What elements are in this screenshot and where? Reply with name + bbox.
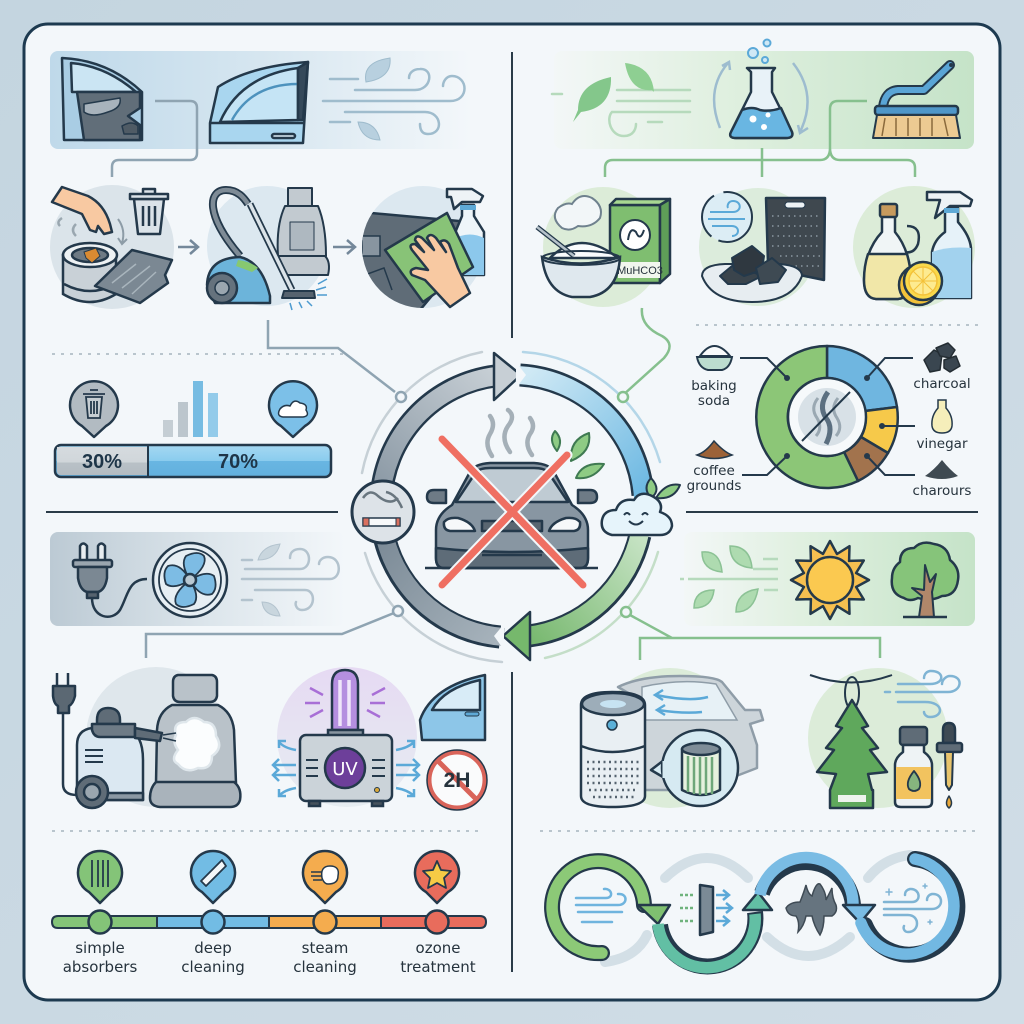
label: charcoal: charcoal <box>913 376 971 392</box>
icon: lemon <box>899 262 942 305</box>
icon: leaves and wind <box>680 546 778 612</box>
progress bar <box>55 445 331 477</box>
connector: bottom right <box>630 615 880 660</box>
panel: vinegar and lemon <box>853 186 975 308</box>
label: 70 percent: 70% <box>218 451 258 473</box>
icon: power plug <box>73 544 147 617</box>
icon: steam puff <box>174 718 219 770</box>
icon: leaves <box>552 431 604 478</box>
icon: vinegar bottle <box>932 400 952 433</box>
label: deep cleaning: deep <box>194 939 232 957</box>
icon: clean air badge <box>269 381 317 437</box>
arrows: around flask <box>714 62 808 133</box>
icon: wind <box>885 671 960 717</box>
arrow: step one to two <box>178 240 198 254</box>
panel: wiping step <box>360 186 484 310</box>
label: NaHCO3: MuHCO3 <box>617 265 663 277</box>
icon: open car door interior <box>62 58 142 140</box>
label: ozone treatment: ozone <box>416 939 460 957</box>
panel: charcoal <box>699 188 825 306</box>
label: simple absorbers: simple <box>75 939 125 957</box>
icon: absorber pin <box>78 851 122 903</box>
panel: steam cleaner <box>53 667 240 808</box>
panel: method timeline <box>52 851 486 976</box>
loop: green <box>552 861 670 953</box>
chart: small bars <box>163 381 218 437</box>
icon: airflow arrows <box>655 690 708 715</box>
icon: steam cloud <box>555 196 601 230</box>
icon: spray bottle <box>447 189 484 275</box>
panel: air freshener <box>808 668 962 808</box>
loop: blue right <box>861 859 957 955</box>
icon: cleaning pin <box>191 851 235 903</box>
icon: filter callout <box>651 730 738 806</box>
panel: vacuum step <box>207 186 329 310</box>
panel: debris removal step <box>50 185 174 309</box>
icon: wiping hand <box>411 235 470 307</box>
icon: plug <box>53 673 77 795</box>
icon: two hour sign <box>427 750 487 810</box>
icon: tree <box>892 543 958 617</box>
label: baking soda: baking <box>691 378 737 394</box>
icon: car seat <box>278 188 329 275</box>
icon: pine tree <box>817 700 887 808</box>
panel: bottom left banner <box>50 532 345 626</box>
arrow: dark grey cycle arc <box>385 538 504 650</box>
label: vinegar: vinegar <box>916 436 968 452</box>
connector nodes <box>393 392 406 616</box>
icon: trash badge <box>70 381 118 437</box>
icon: oil bottle <box>864 204 919 299</box>
icon: UV machine <box>300 735 392 806</box>
icon: steam machine <box>76 708 162 808</box>
icon: hand <box>52 187 112 234</box>
icon: car silhouette <box>618 676 763 790</box>
panel: air flow cycle <box>552 855 957 968</box>
icon: fan <box>153 543 227 617</box>
label: simple absorbers: absorbers <box>63 958 137 976</box>
arrow: blue cycle arrow <box>516 362 643 497</box>
icon: floor mat <box>95 250 172 303</box>
icon: steam pin <box>303 851 347 903</box>
icon: car door with window <box>210 62 308 143</box>
loop: teal <box>658 892 772 968</box>
icon: red cross <box>442 439 583 585</box>
arrow: step two to three <box>333 240 355 254</box>
icon: baking soda bowl <box>697 346 732 370</box>
panel: air purifier <box>581 668 763 808</box>
connector: bottom left <box>146 613 394 658</box>
label: 2H: 2H <box>444 769 470 792</box>
icon: flask <box>730 68 792 138</box>
panel: top left banner <box>50 51 470 149</box>
label: coffee grounds: grounds <box>687 478 741 494</box>
outer thin arcs <box>362 352 660 662</box>
icon: oil bottle <box>895 727 932 807</box>
panel: proportion bar with icons <box>55 381 331 477</box>
icon: smiling cloud <box>602 478 680 535</box>
icon: wind lines <box>576 889 626 922</box>
icon: green cloth <box>385 213 473 302</box>
label: 30 percent: 30% <box>82 451 122 473</box>
icon: dark smoke <box>786 884 836 935</box>
icon: charcoal lumps <box>924 343 960 372</box>
icon: dropper <box>937 723 962 808</box>
timeline bar <box>52 916 486 928</box>
label: charcoal powder: charours <box>913 483 971 499</box>
icon: air purifier <box>581 692 645 807</box>
icon: car seat <box>150 675 240 807</box>
panel: central cycle <box>352 352 680 662</box>
icon: vacuum cleaner <box>207 190 327 310</box>
loop: blue <box>760 858 875 923</box>
label: steam cleaning: cleaning <box>293 958 357 976</box>
icon: bubbles <box>748 40 770 63</box>
arrow: green cycle arrow <box>503 533 640 660</box>
icon: air arrows <box>273 741 419 796</box>
icon: wind swirl circle <box>702 192 752 242</box>
icon: spray bottle <box>927 192 972 298</box>
icon: fresh wind <box>884 884 941 932</box>
icon: filter arrows <box>680 885 732 935</box>
icon: wind and leaves <box>323 58 464 140</box>
icon: car front <box>427 463 597 568</box>
label: ozone treatment: treatment <box>400 958 476 976</box>
icon: car door <box>420 675 485 740</box>
arrow: grey cycle arrow <box>381 353 521 500</box>
icon: sun <box>791 541 869 619</box>
icon: charcoal powder <box>925 460 958 479</box>
label: deep cleaning: cleaning <box>181 958 245 976</box>
label: coffee grounds: coffee <box>693 463 735 479</box>
icon: UV rays <box>305 688 385 717</box>
connector: top left banner to steps <box>112 101 395 392</box>
icon: leaves and wind <box>552 63 690 136</box>
panel: bottom right banner <box>680 532 975 626</box>
panel: baking soda <box>537 187 670 307</box>
icon: charcoal bag <box>766 198 825 280</box>
donut chart <box>756 346 898 488</box>
label: UV: UV <box>332 759 358 780</box>
icon: scrub brush <box>873 63 960 138</box>
icon: UV lamp <box>328 670 363 736</box>
icon: cigarette badge <box>352 481 414 543</box>
loop: faded arcs <box>605 855 910 962</box>
icon: coffee grounds <box>697 441 732 458</box>
connector: top right banner <box>605 101 915 396</box>
panel: donut chart with labels <box>687 343 971 499</box>
icon: ozone pin <box>415 851 459 903</box>
label: baking soda: soda <box>698 393 730 409</box>
panel: UV treatment <box>273 667 487 810</box>
icon: wind and leaf <box>242 544 339 616</box>
icon: steam <box>487 410 533 456</box>
icon: ashtray bucket <box>58 218 117 302</box>
icon: hanging string <box>810 675 892 682</box>
leader lines <box>740 358 915 475</box>
icon: bowl of powder <box>537 227 620 297</box>
label: steam cleaning: steam <box>302 939 348 957</box>
icon: charcoal plate <box>702 246 802 302</box>
arrow: into bucket <box>118 219 127 244</box>
panel: top right banner <box>552 40 974 149</box>
icon: trash can <box>130 189 168 234</box>
